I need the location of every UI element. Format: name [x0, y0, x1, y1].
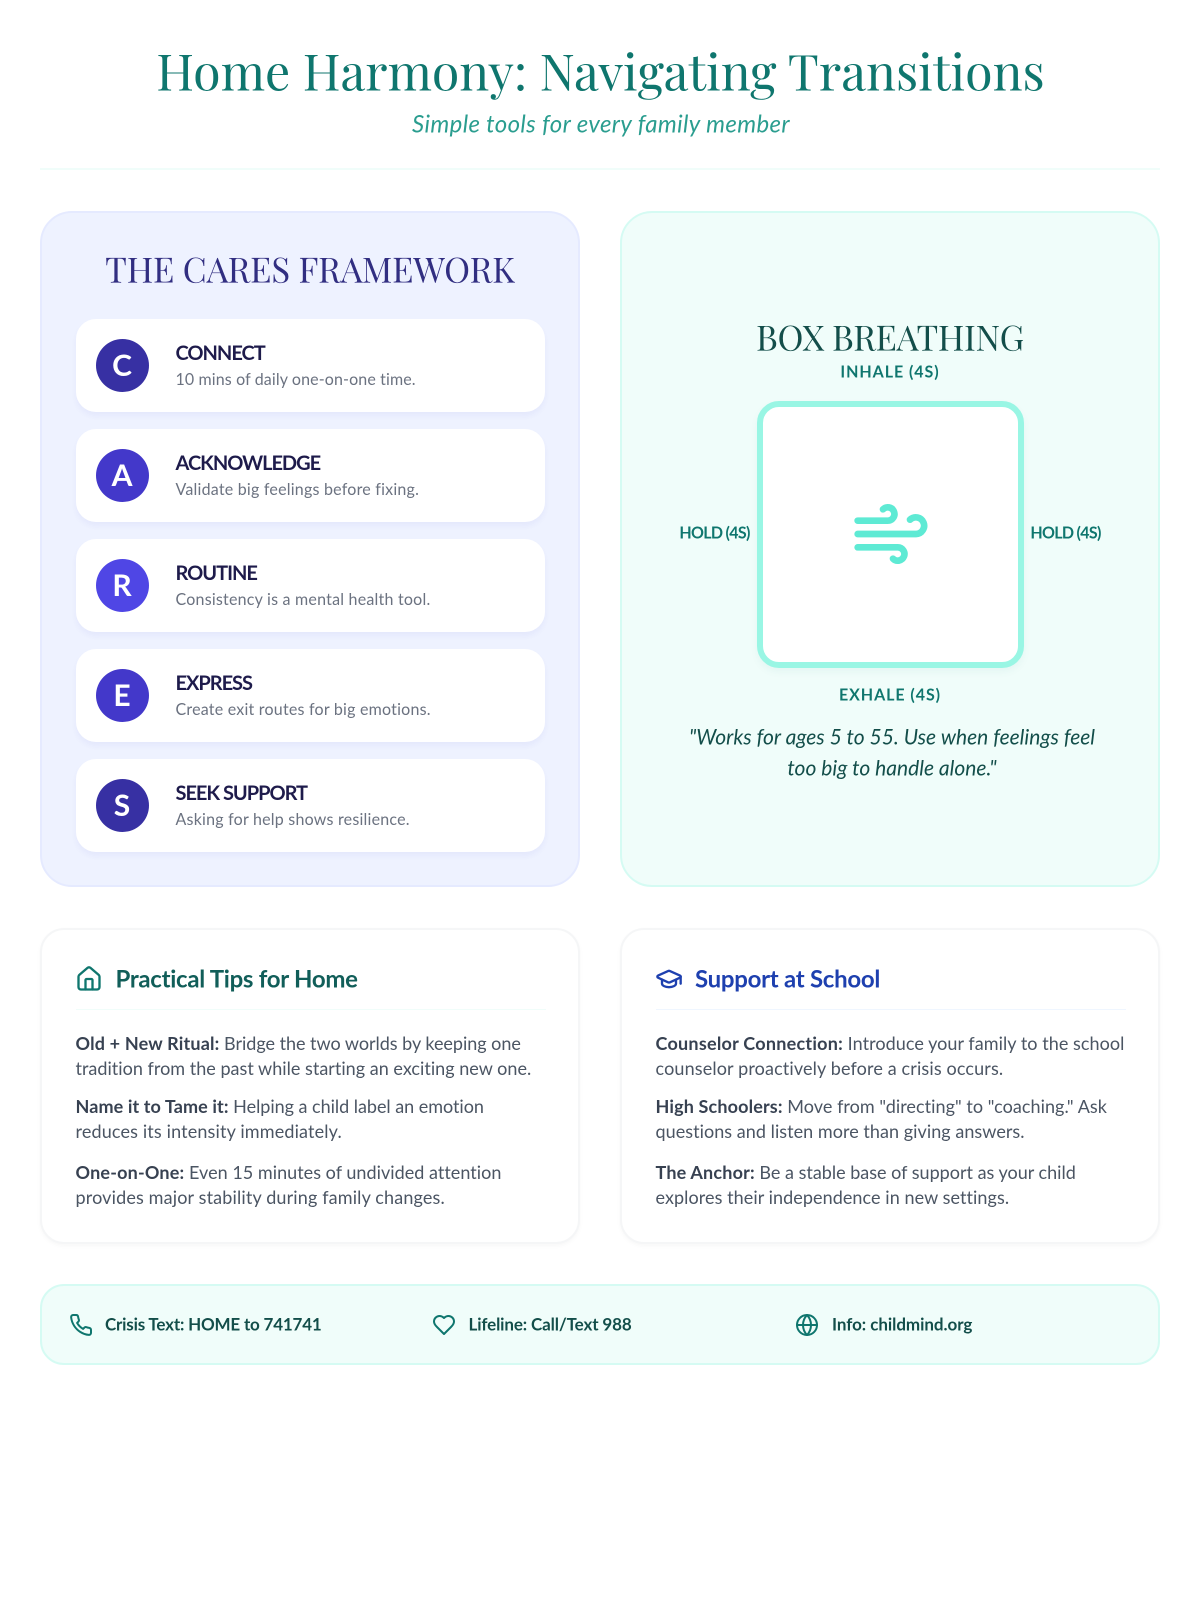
icon: phone [70, 1314, 92, 1336]
card: express: Create exit routes for big emotions. [176, 700, 431, 719]
text block: support at school: counselor proactively before a crisis occurs. High Schoolers: Move from "directing" to "coaching." Ask [656, 1056, 1107, 1116]
text block: practical tips [76, 1032, 531, 1208]
card: connect [76, 319, 545, 412]
heading: practical tips: Practical Tips for Home [116, 964, 358, 994]
quote [689, 724, 1095, 780]
text block: support at school: explores their independence in new settings. [656, 1186, 1009, 1208]
label: hold left: HOLD (4S) [679, 523, 750, 542]
subtitle: Simple tools for every family member [412, 109, 790, 138]
card: routine [76, 539, 545, 632]
panel: practical tips [40, 928, 580, 1244]
text: lifeline: Lifeline: Call/Text 988 [468, 1314, 632, 1334]
quote: "Works for ages 5 to 55. Use when feelings feel [689, 724, 1095, 749]
card: seek support: S [114, 787, 130, 823]
icon: graduation cap [656, 970, 682, 988]
label: hold right: HOLD (4S) [1030, 523, 1101, 542]
quote: too big to handle alone." [787, 756, 997, 780]
text: crisis line: Crisis Text: HOME to 741741 [105, 1314, 322, 1334]
card: routine: R [112, 567, 132, 603]
card: express: EXPRESS [176, 671, 252, 695]
card: seek support: Asking for help shows resilience. [176, 810, 410, 829]
card: acknowledge: Validate big feelings before fixing. [176, 480, 419, 499]
card: connect: C [112, 347, 132, 383]
text block: practical tips: provides major stability during family changes. [76, 1186, 445, 1208]
panel: box breathing [620, 211, 1160, 887]
card: connect: 10 mins of daily one-on-one time. [176, 370, 416, 389]
icon: globe [796, 1314, 818, 1336]
text block: support at school: Counselor Connection: Introduce your family to the school [656, 1032, 1124, 1054]
icon: wind [854, 504, 928, 564]
heading: support at school: Support at School [695, 964, 880, 994]
text: info: Info: childmind.org [832, 1314, 972, 1334]
text block: support at school: questions and listen more than giving answers. The Anchor: Be a stable base of support as your child [656, 1120, 1076, 1182]
card: routine: ROUTINE [176, 561, 257, 585]
card: seek support: SEEK SUPPORT [176, 781, 307, 805]
text block: practical tips: Old + New Ritual: Bridge the two worlds by keeping one [76, 1032, 521, 1054]
panel: support at school [620, 928, 1160, 1244]
card: acknowledge: A [112, 457, 132, 493]
heading: CARES framework: THE CARES FRAMEWORK [105, 244, 515, 291]
text block: support at school [656, 1032, 1124, 1208]
panel: CARES framework [40, 211, 580, 887]
footer: resources [40, 1284, 1160, 1365]
card: express: E [113, 677, 131, 713]
text block: practical tips: reduces its intensity immediately. One-on-One: Even 15 minutes of undivided attention [76, 1120, 501, 1182]
card: acknowledge [76, 429, 545, 522]
card: seek support [76, 759, 545, 852]
card: routine: Consistency is a mental health tool. [176, 590, 430, 609]
label: exhale: EXHALE (4S) [839, 686, 941, 704]
label: inhale: INHALE (4S) [840, 362, 940, 381]
icon: home [77, 966, 101, 991]
icon: heart [433, 1315, 455, 1335]
card: express [76, 649, 545, 742]
heading: box breathing: BOX BREATHING [756, 312, 1024, 360]
breathing box [757, 401, 1024, 668]
text block: practical tips: tradition from the past while starting an exciting new one. Name it to Tame it: Helping a child label an emotion [76, 1056, 531, 1116]
card: connect: CONNECT [176, 341, 265, 365]
title: Home Harmony: Navigating Transitions [156, 36, 1045, 103]
card: acknowledge: ACKNOWLEDGE [176, 451, 320, 475]
